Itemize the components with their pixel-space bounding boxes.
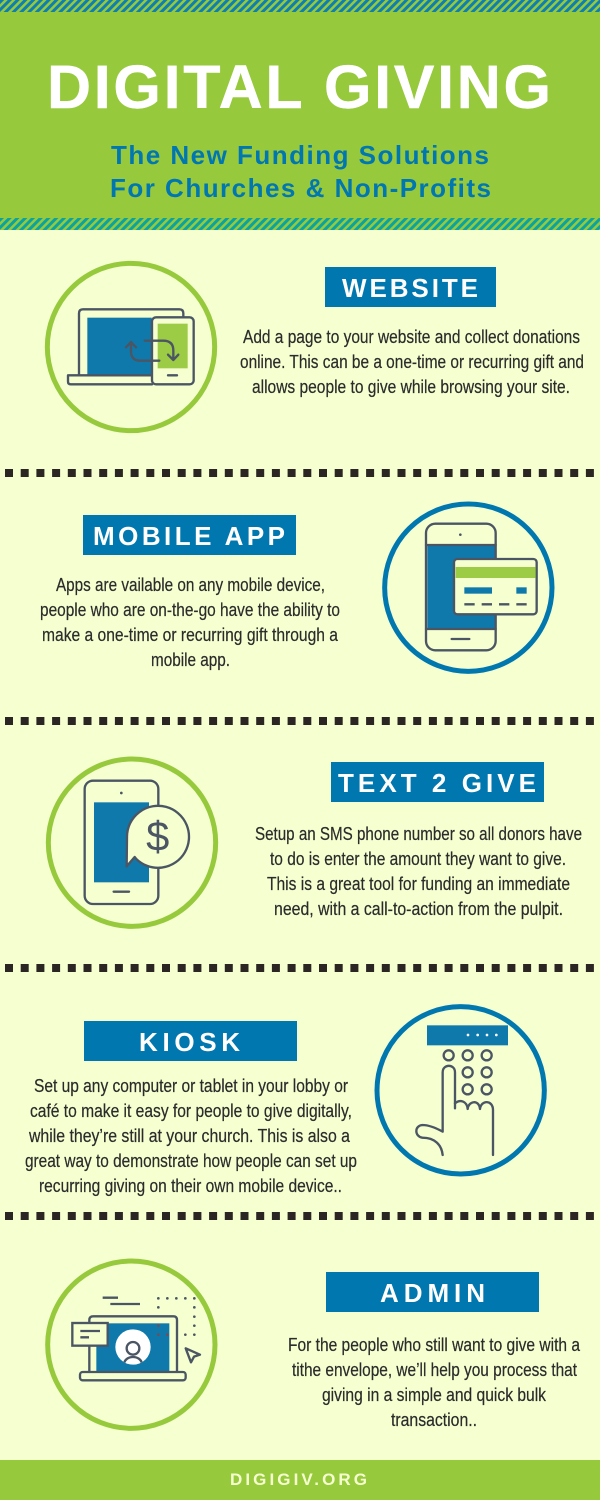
- subtitle: [110, 140, 491, 203]
- subtitle: The New Funding Solutions: [111, 140, 489, 170]
- text: mobile app: people who are on-the-go have the ability to: [40, 600, 340, 620]
- heading: text 2 give: [331, 762, 544, 802]
- text: mobile app: [40, 575, 340, 670]
- text: text 2 give: [255, 824, 582, 919]
- text: mobile app: Apps are vailable on any mobile device,: [56, 575, 325, 595]
- heading: website: WEBSITE: [342, 273, 478, 303]
- footer: DIGIGIV.ORG: [230, 1470, 367, 1489]
- text: kiosk: recurring giving on their own mobile device..: [39, 1176, 342, 1196]
- text: kiosk: café to make it easy for people to give digitally,: [30, 1101, 352, 1121]
- heading: mobile app: MOBILE APP: [93, 521, 285, 551]
- text: website: [240, 327, 584, 397]
- text: kiosk: Set up any computer or tablet in your lobby or: [34, 1076, 348, 1096]
- footer: [0, 1460, 600, 1500]
- panel: mobile app: [40, 504, 552, 671]
- text: admin: transaction..: [391, 1410, 477, 1430]
- text: admin: giving in a simple and quick bulk: [322, 1385, 547, 1405]
- heading: kiosk: [84, 1021, 297, 1061]
- text: mobile app: mobile app.: [151, 650, 230, 670]
- text: kiosk: [25, 1076, 357, 1196]
- subtitle: For Churches & Non-Profits: [110, 173, 491, 203]
- heading: admin: ADMIN: [380, 1278, 485, 1308]
- header banner: [0, 0, 600, 230]
- text: mobile app: make a one-time or recurring gift through a: [42, 625, 339, 645]
- icon: laptop with profile and cursor: [48, 1261, 215, 1428]
- heading: website: [325, 267, 496, 307]
- text: kiosk: while they’re still at your church. This is also a: [28, 1126, 351, 1146]
- icon: phone and credit card: [385, 504, 552, 671]
- text: admin: [288, 1335, 581, 1430]
- heading: mobile app: [83, 515, 296, 555]
- icon: laptop and phone: [47, 263, 215, 431]
- icon: phone with dollar bubble: [48, 759, 216, 926]
- text: text 2 give: need, with a call-to-action from the pulpit.: [274, 899, 563, 919]
- icon: phone with dollar bubble: $: [146, 813, 169, 860]
- panel: admin: [48, 1261, 581, 1430]
- panel: website: [47, 263, 584, 431]
- icon: hand on keypad: [377, 1007, 544, 1174]
- panel: text 2 give: [48, 759, 582, 926]
- title: DIGITAL GIVING: [47, 53, 551, 121]
- heading: kiosk: KIOSK: [139, 1027, 240, 1057]
- heading: text 2 give: TEXT 2 GIVE: [338, 768, 536, 798]
- text: kiosk: great way to demonstrate how people can set up: [25, 1151, 357, 1171]
- panel: kiosk: [25, 1007, 544, 1196]
- heading: admin: [326, 1272, 539, 1312]
